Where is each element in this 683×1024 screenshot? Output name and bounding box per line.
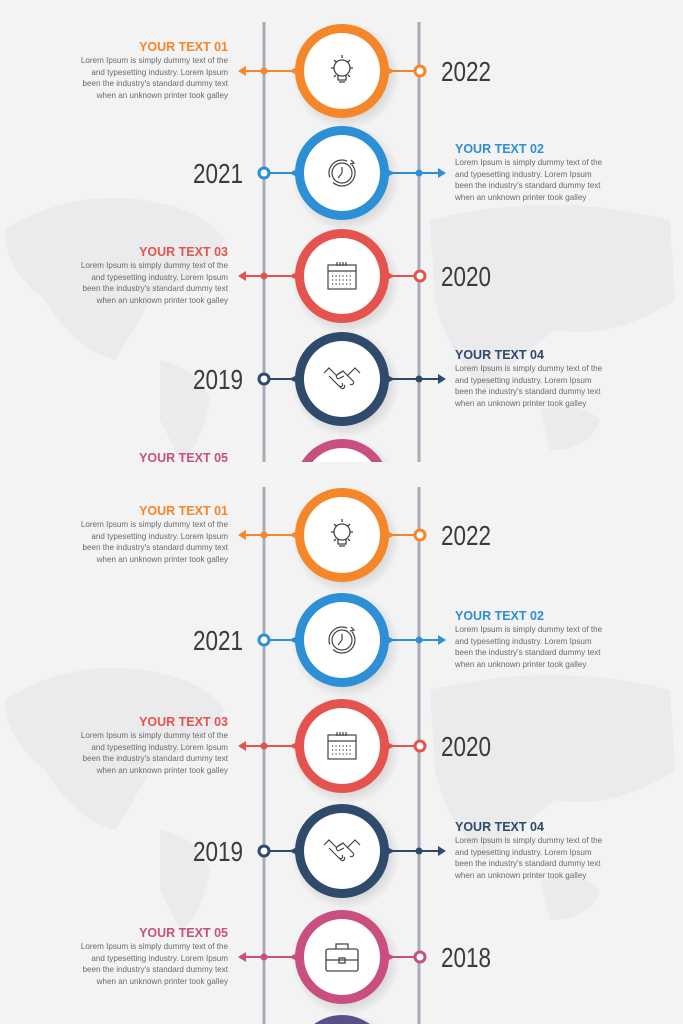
item 03 bottom: when an unknown printer took galley [96, 766, 229, 775]
item 02 bottom: when an unknown printer took galley [454, 660, 587, 669]
item 04 top: YOUR TEXT 04 [455, 348, 544, 362]
item 04 bottom: YOUR TEXT 04 [455, 820, 544, 834]
panel: bottom timeline [81, 486, 603, 1024]
item 01 bottom: Lorem Ipsum is simply dummy text of the [81, 520, 228, 529]
item 02 top: Lorem Ipsum is simply dummy text of the [455, 158, 603, 167]
item 04 bottom: been the industry's standard dummy text [455, 859, 601, 868]
item 01 top [81, 22, 491, 130]
item 03 bottom: been the industry's standard dummy text [82, 754, 229, 763]
item 04 bottom: when an unknown printer took galley [454, 871, 587, 880]
item 03 top: and typesetting industry. Lorem Ipsum [91, 273, 228, 282]
item 02 top [193, 124, 603, 232]
item 02 bottom: been the industry's standard dummy text [455, 648, 601, 657]
item 02 bottom: YOUR TEXT 02 [455, 609, 544, 623]
item 05 bottom: been the industry's standard dummy text [82, 965, 229, 974]
item 01 bottom: 2022 [441, 520, 491, 551]
item 03 top [81, 227, 491, 335]
item 03 bottom [81, 697, 491, 805]
item 04 bottom: 2019 [193, 836, 243, 867]
item 01 bottom: and typesetting industry. Lorem Ipsum [91, 532, 228, 541]
item 02 top: YOUR TEXT 02 [455, 142, 544, 156]
item 01 top: Lorem Ipsum is simply dummy text of the [81, 56, 228, 65]
item 04 bottom: Lorem Ipsum is simply dummy text of the [455, 836, 603, 845]
item 05 bottom: YOUR TEXT 05 [139, 926, 228, 940]
item 05 bottom: 2018 [441, 942, 491, 973]
item 05 top (cut) [139, 439, 386, 462]
item 04 top: 2019 [193, 364, 243, 395]
item 04 top [193, 330, 603, 438]
item 01 top: been the industry's standard dummy text [82, 79, 229, 88]
item 03 top: when an unknown printer took galley [96, 296, 229, 305]
item 02 bottom: and typesetting industry. Lorem Ipsum [455, 637, 592, 646]
item 05 bottom: when an unknown printer took galley [96, 977, 229, 986]
item 03 top: YOUR TEXT 03 [139, 245, 228, 259]
panel: top timeline [82, 22, 602, 462]
item 02 top: 2021 [193, 158, 243, 189]
item 01 bottom: YOUR TEXT 01 [139, 504, 228, 518]
item 02 bottom: Lorem Ipsum is simply dummy text of the [455, 625, 603, 634]
item 04 top: been the industry's standard dummy text [455, 387, 601, 396]
item 02 top: been the industry's standard dummy text [455, 181, 601, 190]
background world map [5, 198, 675, 930]
item 03 top: been the industry's standard dummy text [82, 284, 229, 293]
item 03 top: Lorem Ipsum is simply dummy text of the [81, 261, 228, 270]
item 04 top: when an unknown printer took galley [454, 399, 587, 408]
item 01 top: and typesetting industry. Lorem Ipsum [91, 68, 228, 77]
item 01 bottom: when an unknown printer took galley [96, 555, 229, 564]
item 05 top (cut): YOUR TEXT 05 [139, 451, 228, 465]
item 02 bottom: 2021 [193, 625, 243, 656]
item 03 bottom: YOUR TEXT 03 [139, 715, 228, 729]
item 02 bottom [193, 591, 603, 699]
item 05 bottom: and typesetting industry. Lorem Ipsum [91, 954, 228, 963]
item 01 top: when an unknown printer took galley [96, 91, 229, 100]
item 01 bottom [81, 486, 491, 594]
item 05 bottom [81, 908, 491, 1016]
item 01 top: 2022 [441, 56, 491, 87]
item 03 bottom: and typesetting industry. Lorem Ipsum [91, 743, 228, 752]
item 03 bottom: 2020 [441, 731, 491, 762]
item 01 bottom: been the industry's standard dummy text [82, 543, 229, 552]
item 01 top: YOUR TEXT 01 [139, 40, 228, 54]
item 05 bottom: Lorem Ipsum is simply dummy text of the [81, 942, 228, 951]
item 06 bottom (cut) [314, 1015, 370, 1024]
item 03 top: 2020 [441, 261, 491, 292]
item 03 bottom: Lorem Ipsum is simply dummy text of the [81, 731, 228, 740]
item 02 top: when an unknown printer took galley [454, 193, 587, 202]
item 04 top: Lorem Ipsum is simply dummy text of the [455, 364, 603, 373]
item 04 top: and typesetting industry. Lorem Ipsum [455, 376, 592, 385]
item 04 bottom: and typesetting industry. Lorem Ipsum [455, 848, 592, 857]
item 02 top: and typesetting industry. Lorem Ipsum [455, 170, 592, 179]
item 04 bottom [193, 802, 603, 910]
